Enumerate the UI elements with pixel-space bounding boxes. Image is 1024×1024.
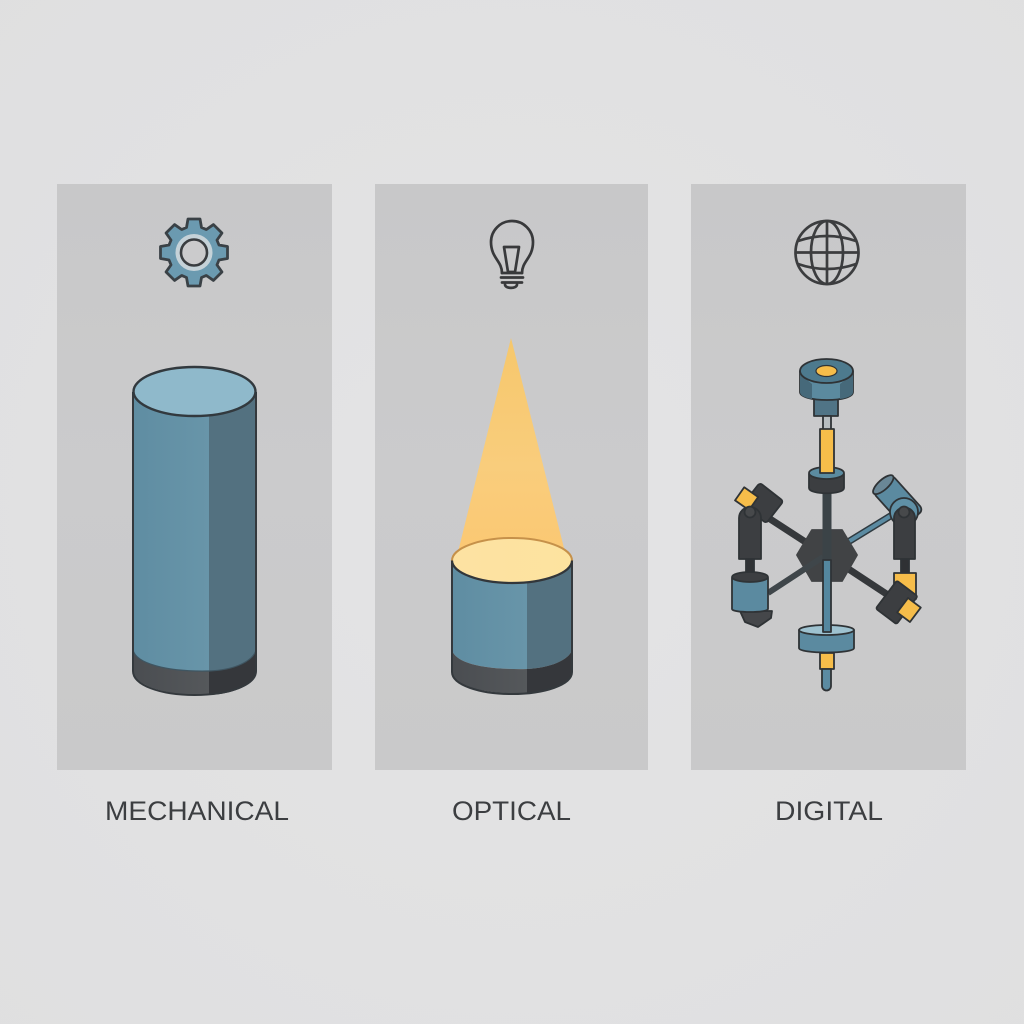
lower shaft and puck bbox=[799, 560, 854, 690]
icon: gear bbox=[160, 219, 228, 286]
label: digital: DIGITAL bbox=[775, 796, 883, 826]
upper collar and shaft bbox=[809, 429, 844, 560]
right arm bbox=[870, 472, 923, 624]
label: optical: OPTICAL bbox=[452, 796, 571, 826]
panel: mechanical bbox=[57, 184, 332, 770]
diagonal link over hub bbox=[768, 557, 823, 593]
icon: light bulb bbox=[491, 221, 533, 288]
panel: digital bbox=[691, 184, 966, 770]
central hub bbox=[797, 530, 857, 581]
left arm bbox=[732, 483, 783, 627]
illustration: tall cylinder bbox=[133, 367, 256, 695]
rods to hub bbox=[767, 515, 892, 595]
top puck bbox=[800, 359, 853, 430]
label: mechanical: MECHANICAL bbox=[105, 796, 289, 826]
panel: optical bbox=[375, 184, 648, 770]
illustration: articulated mechanism bbox=[732, 359, 923, 690]
illustration: short cylinder bbox=[452, 538, 572, 694]
light beam bbox=[458, 338, 565, 552]
icon: globe bbox=[796, 221, 858, 284]
